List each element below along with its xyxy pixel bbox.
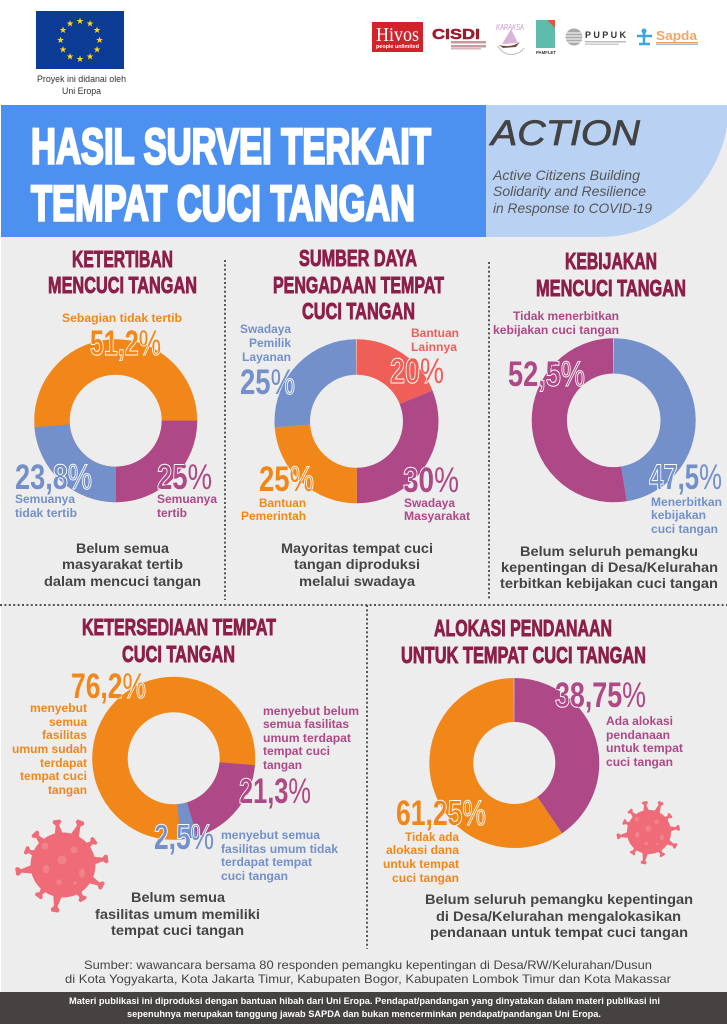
header: EU flag with caption: ★ (66, 18, 74, 28)
header: EU flag with caption: Proyek ini didanai oleh (37, 74, 126, 85)
logo: CISDI: CISDI (432, 26, 480, 43)
label: semuanya tidak tertib: 23,8% (15, 458, 92, 497)
header: EU flag with caption: ★ (76, 16, 84, 26)
source note (65, 958, 671, 986)
label: bantuan lainnya: Lainnya (411, 340, 457, 354)
label: menerbitkan: Menerbitkan (651, 495, 722, 509)
header: partner logos (372, 20, 698, 55)
label: tidak terdapat: menyebut semua (221, 828, 320, 842)
banner: light blue ACTION panel: Solidarity and Resilience (493, 183, 646, 199)
label: swadaya pemilik layanan: Layanan (242, 350, 291, 364)
label: sebagian tidak tertib: Sebagian tidak tertib (62, 311, 182, 325)
label: tidak terdapat: 2,5% (154, 818, 214, 857)
icon: virus (15, 819, 109, 913)
label: tidak terdapat: fasilitas umum tidak (221, 842, 338, 856)
label: belum semua: menyebut belum (263, 704, 359, 718)
logo: Pamflet: PAMFLET (536, 50, 556, 55)
heading: CUCI TANGAN (122, 641, 235, 667)
banner: light blue ACTION panel (486, 105, 727, 237)
heading: SUMBER DAYA (299, 245, 417, 271)
label: tidak terdapat (154, 818, 338, 883)
donut chart (451, 700, 577, 826)
heading: PENGADAAN TEMPAT (273, 272, 444, 298)
label: bantuan lainnya: Bantuan (411, 326, 459, 340)
summary text (281, 540, 433, 589)
summary text: Belum semua (131, 889, 225, 905)
banner: light blue ACTION panel: ACTION (489, 114, 641, 153)
label: sudah terdapat: fasilitas (42, 728, 87, 742)
logo: CISDI (432, 26, 486, 50)
donut chart (110, 695, 237, 822)
label: tidak ada alokasi: Tidak ada (405, 830, 459, 844)
label: menerbitkan (649, 458, 722, 536)
header: EU flag with caption: ★ (56, 35, 65, 45)
summary text: Belum seluruh pemangku (520, 543, 698, 559)
label: sudah terdapat: menyebut (30, 701, 87, 715)
label: menerbitkan: kebijakan (651, 508, 706, 522)
header: EU flag with caption: ★ (66, 52, 74, 62)
label: sudah terdapat: terdapat (40, 756, 87, 770)
label: swadaya masyarakat: Swadaya (404, 496, 455, 510)
summary text: tempat cuci tangan (111, 922, 244, 938)
logo: Sapda (637, 28, 698, 45)
footer disclaimer: sepenuhnya merupakan tanggung jawab SAPDA dan bukan mencerminkan pendapat/pandangan Uni Eropa. (127, 1009, 601, 1020)
label: tidak menerbitkan: kebijakan cuci tangan (493, 323, 619, 337)
banner: main title: TEMPAT CUCI TANGAN (31, 176, 415, 232)
summary text: Belum seluruh pemangku kepentingan (425, 891, 693, 907)
header: EU flag with caption: ★ (76, 54, 84, 64)
heading: MENCUCI TANGAN (48, 272, 197, 298)
label: sudah terdapat: tangan (48, 783, 87, 797)
label: tidak ada alokasi: cuci tangan (392, 871, 459, 885)
label: tidak menerbitkan: 52,5% (508, 355, 585, 394)
label: bantuan lainnya: 20% (390, 352, 444, 391)
label: ada alokasi: untuk tempat (606, 741, 683, 755)
label: semuanya tertib: Semuanya (157, 492, 217, 506)
label: ada alokasi: cuci tangan (606, 755, 673, 769)
label: menerbitkan: cuci tangan (651, 522, 718, 536)
banner: light blue ACTION panel: in Response to COVID-19 (493, 200, 652, 216)
label: swadaya masyarakat: 30% (403, 461, 459, 500)
banner: main title: HASIL SURVEI TERKAIT (31, 118, 431, 174)
label: swadaya pemilik layanan: Pemilik (249, 336, 291, 350)
summary text (500, 543, 718, 591)
header: EU flag with caption: ★ (95, 35, 104, 45)
panel: ketertiban mencuci tangan (15, 246, 217, 589)
label: ada alokasi: pendanaan (606, 728, 670, 742)
summary text (44, 540, 201, 589)
heading: ALOKASI PENDANAAN (434, 615, 612, 641)
label: swadaya pemilik layanan (240, 324, 294, 395)
summary text: Mayoritas tempat cuci (281, 540, 433, 556)
label: swadaya masyarakat (403, 461, 470, 523)
summary text (425, 891, 693, 940)
label: swadaya masyarakat: Masyarakat (404, 509, 470, 523)
label: tidak menerbitkan: Tidak menerbitkan (513, 309, 619, 323)
footer disclaimer (0, 992, 727, 1024)
label: bantuan lainnya (390, 328, 458, 384)
heading: CUCI TANGAN (302, 298, 415, 324)
label: tidak ada alokasi: 61,25% (396, 794, 486, 833)
summary text: dalam mencuci tangan (44, 573, 201, 589)
summary text: masyarakat tertib (62, 556, 183, 572)
summary text: di Desa/Kelurahan mengalokasikan (436, 908, 681, 924)
heading (82, 614, 276, 667)
summary text: Belum semua (76, 540, 169, 556)
label: semuanya tidak tertib (15, 464, 92, 517)
summary text: terbitkan kebijakan cuci tangan (500, 575, 718, 591)
label: belum semua: 21,3% (239, 772, 311, 811)
label: belum semua: tangan (263, 758, 302, 772)
footer disclaimer: Materi publikasi ini diproduksi dengan bantuan hibah dari Uni Eropa. Pendapat/pandangan yang dinyatakan dalam materi publikasi ini (69, 996, 660, 1007)
label: semuanya tidak tertib: tidak tertib (15, 506, 77, 520)
donut chart (292, 357, 421, 486)
summary text: kepentingan di Desa/Kelurahan (501, 559, 718, 575)
panel: kebijakan mencuci tangan (493, 248, 722, 591)
panel: alokasi pendanaan (383, 615, 693, 940)
label: tidak terdapat: terdapat tempat (221, 855, 312, 869)
label: sudah terdapat: 76,2% (71, 667, 146, 706)
summary text: fasilitas umum memiliki (95, 906, 260, 922)
source note: di Kota Yogyakarta, Kota Jakarta Timur, Kabupaten Bogor, Kabupaten Lombok Timur dan Kota Makassar (65, 972, 671, 986)
label: bantuan pemerintah: Pemerintah (241, 509, 306, 523)
header: EU flag with caption (36, 11, 126, 97)
label: sebagian tidak tertib (62, 311, 182, 363)
label: belum semua: umum terdapat (263, 731, 351, 745)
heading: KETERSEDIAAN TEMPAT (82, 614, 276, 640)
label: tidak ada alokasi: untuk tempat (383, 857, 459, 871)
label: sudah terdapat (12, 667, 146, 797)
label: belum semua (239, 704, 359, 811)
logo: Hivos: people unlimited (376, 44, 419, 50)
label: bantuan pemerintah: 25% (259, 460, 314, 499)
label: belum semua: tempat cuci (263, 744, 330, 758)
logo: Hivos (372, 22, 423, 52)
donut chart (549, 356, 678, 485)
label: belum semua: semua fasilitas (263, 717, 349, 731)
header: EU flag with caption: ★ (93, 44, 101, 54)
logo: Pupuk: PUPUK (585, 30, 626, 40)
label: tidak menerbitkan (493, 309, 619, 394)
donut chart (52, 357, 179, 484)
label: sudah terdapat: semua (49, 715, 87, 729)
heading (48, 246, 197, 298)
label: semuanya tertib: 25% (157, 458, 212, 497)
logo: Karaksa: KARAKSA (496, 23, 524, 32)
logo: Hivos: Hivos (376, 24, 419, 46)
label: bantuan pemerintah (242, 466, 314, 520)
header: EU flag with caption: ★ (93, 25, 101, 35)
label: ada alokasi (555, 676, 683, 769)
icon: virus small (616, 801, 680, 865)
banner: main title (1, 105, 486, 237)
heading (273, 245, 444, 324)
label: ada alokasi: Ada alokasi (606, 714, 673, 728)
heading (401, 615, 646, 668)
header: EU flag with caption: ★ (86, 18, 94, 28)
heading: KETERTIBAN (72, 246, 173, 272)
label: sudah terdapat: tempat cuci (20, 769, 87, 783)
summary text: tangan diproduksi (294, 556, 420, 572)
label: swadaya pemilik layanan: Swadaya (240, 322, 291, 336)
label: swadaya pemilik layanan: 25% (240, 363, 295, 402)
label: semuanya tertib (157, 464, 218, 517)
panel: sumber daya pengadaan (240, 245, 470, 589)
heading: KEBIJAKAN (565, 248, 657, 274)
label: semuanya tertib: tertib (157, 506, 187, 520)
header: EU flag with caption: ★ (59, 44, 67, 54)
label: bantuan pemerintah: Bantuan (259, 496, 306, 510)
panel: ketersediaan tempat cuci tangan (12, 614, 359, 938)
logo: Pamflet (536, 20, 556, 55)
label: tidak ada alokasi: alokasi dana (386, 843, 459, 857)
summary text: melalui swadaya (299, 573, 415, 589)
label: tidak ada alokasi (383, 794, 486, 885)
header: EU flag with caption: Uni Eropa (62, 86, 102, 97)
banner: light blue ACTION panel: Active Citizens Building (492, 167, 640, 183)
summary text: pendanaan untuk tempat cuci tangan (430, 924, 688, 940)
label: sebagian tidak tertib: 51,2% (90, 324, 161, 363)
label: semuanya tidak tertib: Semuanya (15, 492, 75, 506)
header: EU flag with caption: ★ (59, 25, 67, 35)
summary text (95, 889, 260, 938)
header: EU flag with caption: ★ (86, 52, 94, 62)
label: ada alokasi: 38,75% (555, 676, 646, 715)
banner (1, 105, 727, 237)
label: tidak terdapat: cuci tangan (221, 869, 288, 883)
label: sudah terdapat: umum sudah (12, 742, 87, 756)
heading (536, 248, 686, 301)
logo: Pupuk (565, 28, 626, 46)
logo: Karaksa (496, 23, 524, 55)
logo: Sapda: Sapda (656, 28, 698, 43)
source note: Sumber: wawancara bersama 80 responden pemangku kepentingan di Desa/RW/Kelurahan/Dusun (84, 958, 652, 972)
